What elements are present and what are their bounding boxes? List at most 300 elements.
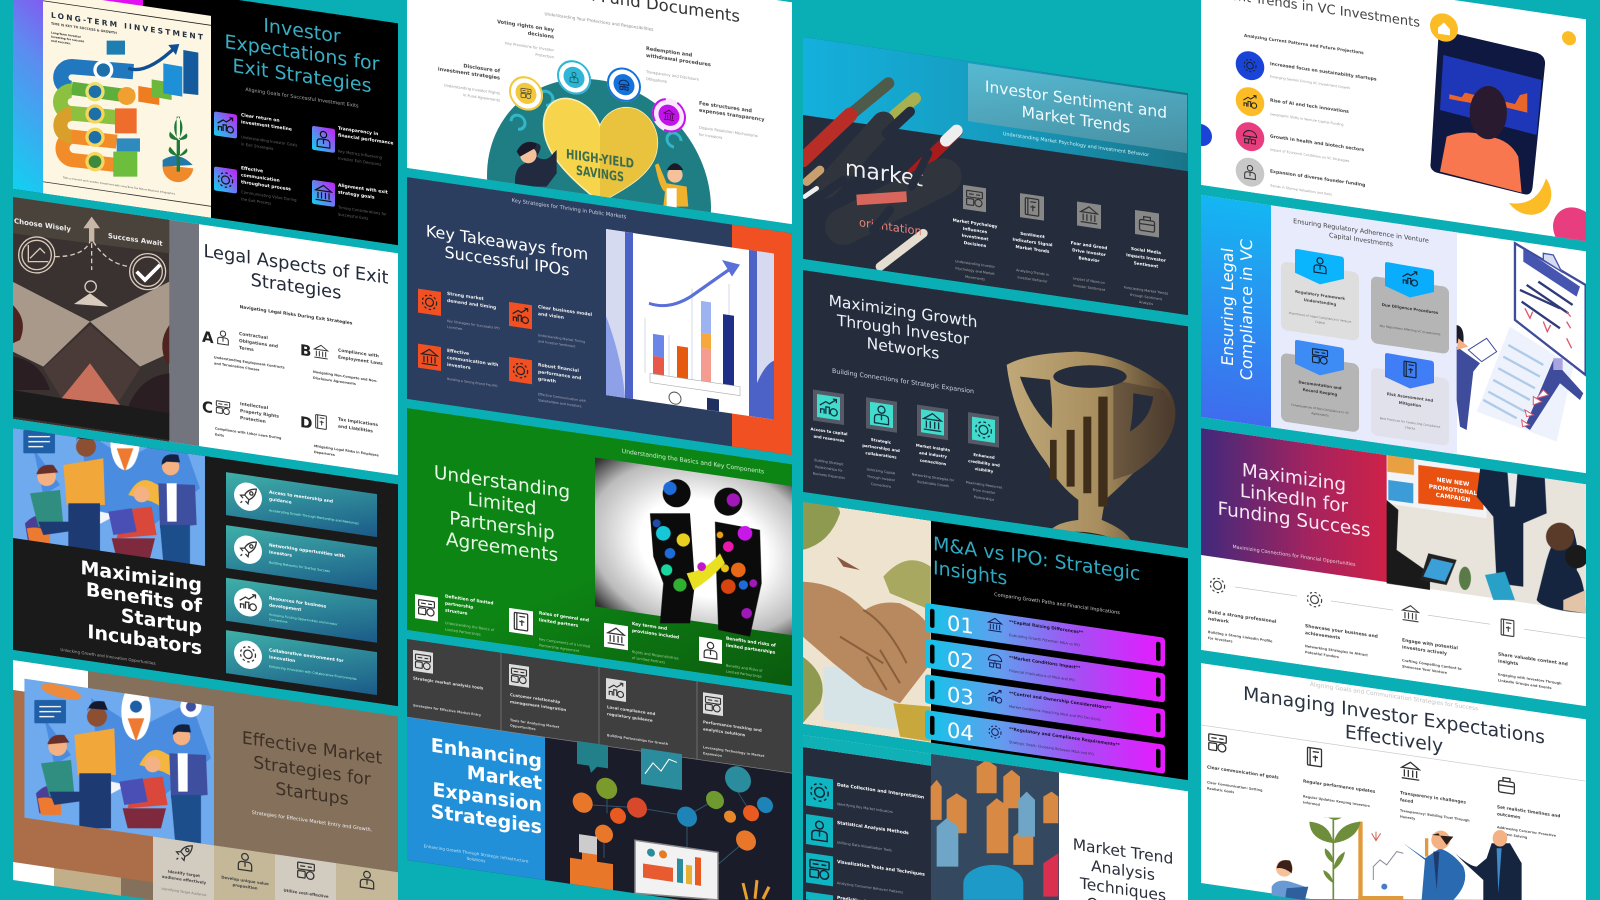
title: Maximizing Growth xyxy=(829,292,977,331)
card: networking: Building Networks for Startup Success xyxy=(269,560,330,573)
title: Strategies xyxy=(251,270,341,304)
title: Key Takeaways from xyxy=(426,221,588,264)
item B: Navigating Non-Compete and Non- xyxy=(313,370,378,383)
photo: handshake over map xyxy=(803,483,931,760)
item: social media: Forecasting Market Trends xyxy=(1124,285,1168,296)
item: sustainability xyxy=(1236,49,1377,98)
item: voting rights: Key Provisions for Investor xyxy=(505,41,554,53)
card: resources: Connections xyxy=(269,617,288,624)
item: definition xyxy=(415,589,495,639)
item: redemption xyxy=(646,46,711,83)
item: clear model xyxy=(509,300,592,351)
item: clear communication: Realistic Goals xyxy=(1207,786,1234,794)
item B: Employment Laws xyxy=(338,354,383,367)
item: sentiment indicators xyxy=(1013,192,1053,284)
card: regulatory framework: Capital xyxy=(1315,320,1325,325)
title panel xyxy=(968,63,1187,153)
photo: promotional campaign meeting: PROMOTIONAL xyxy=(1429,484,1477,497)
card: documentation: Consequences of Non-Compliance in VC xyxy=(1291,403,1349,415)
item: regular updates xyxy=(1303,747,1376,815)
item: redemption: withdrawal procedures xyxy=(646,53,711,68)
item: voting rights: decisions xyxy=(528,31,554,40)
title: Legal Aspects of Exit xyxy=(203,241,389,289)
card: risk assessment: Mitigation xyxy=(1399,400,1421,408)
title: Expansion xyxy=(432,778,542,817)
title: Agreements xyxy=(446,529,558,567)
item: data collection: Identifying Key Market Indicators xyxy=(837,802,893,814)
card: mentorship: guidance xyxy=(269,496,292,506)
item C: Intellectual xyxy=(240,401,269,411)
item: voting rights: Protection xyxy=(535,53,555,60)
card: regulatory framework xyxy=(1281,247,1359,341)
item A: A xyxy=(202,328,214,347)
item: share insights xyxy=(1498,618,1586,695)
title: M&A vs IPO: Strategic xyxy=(933,532,1140,585)
item: strong demand xyxy=(418,287,500,337)
vertical title: Compliance in VC xyxy=(1237,238,1256,382)
item: access to capital xyxy=(811,389,848,481)
item: communication: Effective xyxy=(447,348,469,357)
card: documentation: Record Keeping xyxy=(1303,387,1337,397)
item: performance tracking: Leveraging Technology in Market xyxy=(703,745,765,758)
item: transparency xyxy=(1400,761,1470,829)
item: communication: Effective xyxy=(241,165,263,175)
panel: M&A vs IPO Strategic Insights xyxy=(803,483,1188,798)
item: data collection: Data Collection and Interpretation xyxy=(837,782,924,801)
item: clear return: Clear return on xyxy=(241,112,280,124)
panel: Maximizing Benefits of Startup Incubators xyxy=(13,428,398,706)
item: partnerships: Connections xyxy=(871,482,891,489)
card: due diligence: Due Diligence Procedures xyxy=(1382,302,1439,315)
item: realistic timelines: outcomes xyxy=(1497,811,1521,821)
item: realistic timelines xyxy=(1497,777,1560,844)
title: Investor Sentiment and xyxy=(985,78,1167,122)
item: professional network: for Investors xyxy=(1208,636,1232,644)
item: partnerships: Unlocking Capital xyxy=(867,467,895,475)
illustration: high-yield savings heart: SAVINGS xyxy=(576,164,624,186)
subtitle: Aligning Goals and Communication Strategies for Success xyxy=(1310,682,1478,712)
item: share insights: Share valuable content and xyxy=(1498,651,1568,668)
photo: promotional campaign meeting xyxy=(1387,414,1588,643)
title: Understanding xyxy=(434,463,570,503)
item: market analysis tools: Strategic market analysis tools xyxy=(413,675,484,691)
item D: and Liabilities xyxy=(338,423,373,435)
item: fear and greed: Fear and Greed xyxy=(1071,240,1107,250)
item: benefits: Benefits and risks of xyxy=(726,636,776,649)
item: communication: Building a Strong Brand Pre-IPO xyxy=(447,377,498,388)
subtitle: Enhancing Growth Through Strategic Infrastructure xyxy=(424,843,529,864)
photo: crossroads: Choose Wisely xyxy=(14,216,71,234)
row 02: **Market Conditions Impact** xyxy=(1009,655,1081,671)
row 03 xyxy=(925,674,1165,738)
card: value proposition xyxy=(214,845,275,900)
card: mentorship: Accelerating Growth Through Mentorship and Resources xyxy=(269,508,359,526)
item: transparency: Transparency in challenges xyxy=(1400,790,1466,806)
item: market psychology: Psychology and Market xyxy=(955,266,995,276)
item: partnerships: Strategic xyxy=(871,437,892,445)
row 04 xyxy=(925,710,1165,774)
card: risk assessment xyxy=(1371,351,1449,446)
item: financial performance: Robust financial xyxy=(538,362,579,374)
card: maximize xyxy=(336,863,398,900)
item: transparency: financial performance xyxy=(338,132,393,147)
item: CRM integration: Tools for Analyzing Market xyxy=(510,718,560,729)
item: CRM integration: management integration xyxy=(510,699,566,712)
item: financial performance xyxy=(509,357,586,409)
photo strips: market orientation: orientation xyxy=(859,215,922,238)
item: credibility: visibility xyxy=(975,466,994,474)
item: sentiment indicators: Investor Behavior xyxy=(1018,275,1048,284)
card: documentation: Documentation and xyxy=(1298,379,1342,391)
title: Effective Market xyxy=(242,728,382,769)
panel: Investor Expectations for Exit Strategies xyxy=(13,0,398,245)
item: access to capital: and resources xyxy=(814,434,845,443)
title: Maximizing xyxy=(81,556,202,597)
item: market analysis tools: Strategies for Effective Market Entry xyxy=(413,703,482,717)
card: risk assessment: Checks xyxy=(1405,425,1416,431)
illustration: network of icons and laptop xyxy=(570,738,773,900)
item: financial performance: Effective Communication with xyxy=(538,392,586,403)
item: communication: communication xyxy=(241,172,280,184)
title: Managing Investor Expectations xyxy=(1243,683,1545,749)
item: alignment: strategy goals xyxy=(338,189,375,201)
card: value proposition: Develop unique value xyxy=(221,874,269,886)
item: diverse founders: Trends in Startup Valuations and Exits xyxy=(1269,183,1332,197)
item: diverse founders xyxy=(1236,156,1365,203)
item: disclosure: investment strategies xyxy=(438,67,500,82)
item A: and Termination Clauses xyxy=(214,361,259,372)
item: communication: communication with xyxy=(447,355,498,368)
item: transparency xyxy=(312,126,394,166)
item: market insights: Market insights xyxy=(916,443,951,453)
item A: Terms xyxy=(239,345,254,353)
item C xyxy=(202,400,282,440)
subtitle: Strategies for Effective Market Entry and Growth. xyxy=(252,810,373,833)
item: social media: Sentiment xyxy=(1134,260,1158,269)
item: showcase: Potential Funders xyxy=(1305,650,1339,659)
illustration: clipboard and reviewer xyxy=(1457,243,1586,442)
item: market psychology: Decisions xyxy=(964,240,987,248)
item: performance tracking: analytics solutions xyxy=(703,726,746,737)
item: communication xyxy=(418,344,498,388)
illustration: high-yield savings heart xyxy=(487,60,711,212)
card: resources xyxy=(226,578,377,643)
photo strips: market orientation xyxy=(803,61,957,289)
item: clear return xyxy=(214,112,298,150)
subtitle: Comparing Growth Paths and Financial Implications xyxy=(994,592,1120,616)
item: fear and greed: Impact of News on xyxy=(1073,276,1105,285)
item: access to capital: Building Strategic xyxy=(814,458,844,466)
item: professional network: Building a Strong LinkedIn Profile xyxy=(1208,630,1273,644)
item: realistic timelines: Problem Solving xyxy=(1497,831,1528,840)
item: fear and greed: Drive Investor xyxy=(1072,247,1107,257)
card: risk assessment: Risk Assessment and xyxy=(1387,391,1433,403)
item: redemption: Transparency and Disclosure xyxy=(645,70,700,82)
item: health and biotech xyxy=(1236,120,1364,168)
item: alignment: Alignment with exit xyxy=(338,182,389,196)
item: fees xyxy=(699,101,764,139)
item: key terms xyxy=(604,617,679,667)
panel: Understanding Limited Partnership Agreements xyxy=(407,408,792,686)
title: Partnership xyxy=(449,508,555,545)
decorative dot: blue xyxy=(1190,122,1212,148)
photo: crossroads xyxy=(13,197,170,442)
item: voting rights: Voting rights on key xyxy=(497,19,555,34)
card: collaboration: Enhancing Innovation with Collaborative Environments xyxy=(269,664,357,681)
item: credibility xyxy=(966,412,1002,503)
item C: Protection xyxy=(240,415,266,425)
item: local compliance: regulatory guidance xyxy=(607,711,653,723)
title: Startups xyxy=(275,779,349,810)
item: financial performance: performance and xyxy=(538,369,581,381)
item: alignment: Timing Considerations for xyxy=(337,204,387,217)
item: visualization tools: Analyzing Consumer Behavior Patterns xyxy=(837,881,903,895)
title: Market Trend xyxy=(1073,835,1173,868)
item: alignment xyxy=(312,180,388,220)
title: Enhancing xyxy=(431,734,542,773)
row 04: **Regulatory and Compliance Requirements** xyxy=(1009,726,1121,748)
item: transparency: faced xyxy=(1400,797,1413,805)
card: networking: investors xyxy=(269,549,292,559)
item: regular updates: Informed xyxy=(1303,800,1320,807)
item B: Compliance with xyxy=(338,347,379,359)
item: CRM integration: Customer relationship xyxy=(510,692,560,704)
card: networking xyxy=(226,525,377,590)
item: market insights: Sustainable Growth xyxy=(917,480,949,488)
item: clear model: and vision xyxy=(538,311,564,321)
item: sentiment indicators: Market Trends xyxy=(1016,244,1050,254)
card: identify target: Identify target xyxy=(168,869,200,878)
item: key terms: provisions included xyxy=(632,628,679,641)
panel: Investor Sentiment and Market Trends xyxy=(803,37,1188,323)
panel: Recent Trends in VC Investments xyxy=(1190,0,1597,255)
title: LinkedIn for xyxy=(1240,481,1348,518)
row 01: **Capital Raising Differences** xyxy=(1009,619,1084,636)
item: fear and greed: Behavior xyxy=(1079,255,1100,263)
panel: Effective Market Strategies for Startups xyxy=(13,643,398,900)
card: cost-effective marketing xyxy=(275,854,336,900)
item: redemption: Redemption and xyxy=(646,46,693,59)
row 01: Evaluating Growth Potential: M&A vs IPO xyxy=(1009,633,1080,647)
item: clear model: Clear business model xyxy=(538,304,592,318)
item: transparency: Transparency in xyxy=(338,125,378,137)
row 02 xyxy=(925,639,1165,703)
item: fear and greed xyxy=(1071,201,1107,292)
poster: long-term investment: Long-Term Investor xyxy=(51,31,82,39)
title: Benefits of xyxy=(86,578,203,618)
subtitle: Capital Investments xyxy=(1329,231,1394,249)
item: market psychology xyxy=(953,183,998,283)
item: regular updates: Regular performance updates xyxy=(1303,778,1376,795)
item: AI and tech xyxy=(1236,85,1349,130)
item: sustainability: Increased focus on sustainability startups xyxy=(1270,61,1377,83)
item: communication: throughout process xyxy=(241,179,291,193)
item: partnerships: partnerships and xyxy=(862,443,900,453)
poster: long-term investment: and success. xyxy=(51,39,71,45)
item B: B xyxy=(300,341,311,361)
item C: Property Rights xyxy=(240,408,279,420)
vertical title: Ensuring Legal xyxy=(1218,247,1237,367)
item B xyxy=(301,344,382,385)
item: realistic timelines: Addressing Concerns: Proactive xyxy=(1497,825,1557,838)
panel: Maximizing Growth Through Investor Networks xyxy=(803,270,1188,590)
item: definition: Definition of limited xyxy=(445,594,493,607)
subtitle: Building Connections for Strategic Expansion xyxy=(832,368,974,395)
card: resources: Accessing Funding Opportunities and Investor xyxy=(269,612,338,626)
item: sustainability: Emerging Sectors Driving VC Investment Growth xyxy=(1270,75,1350,90)
row 02: 02 xyxy=(947,646,974,675)
item: performance tracking: Expansion xyxy=(703,751,723,758)
title: Exit Strategies xyxy=(232,54,372,97)
panel: Key Takeaways from Successful IPOs xyxy=(407,177,792,455)
title: Limited xyxy=(468,489,536,520)
item: access to capital: Business Expansion xyxy=(813,471,845,480)
subtitle: Understanding Market Psychology and Investment Behavior xyxy=(1003,131,1150,159)
card: collaboration: Collaborative environment for xyxy=(269,647,344,664)
poster: long-term investment: TIME IS KEY TO SUCCESS & GROWTH xyxy=(51,22,117,35)
poster: long-term investment: Take a moment and consider Investment with Long-Term Tax Return Business Infographics xyxy=(63,175,176,196)
card: networking: Networking opportunities with xyxy=(269,542,345,559)
illustration: startup team xyxy=(13,428,206,566)
item: AI and tech: Geographic Shifts in Venture Capital Funding xyxy=(1270,112,1344,127)
item: statistical analysis xyxy=(806,814,909,859)
item: market psychology: Understanding Investor xyxy=(955,259,996,269)
item: communication: investors xyxy=(447,362,471,371)
item: definition: Limited Partnerships xyxy=(445,628,481,637)
title: Effectively xyxy=(1345,721,1443,757)
item: social media: Social Media xyxy=(1131,246,1161,255)
subtitle: Analyzing Current Patterns and Future Projections xyxy=(1244,33,1364,55)
item: fees: expenses transparency xyxy=(699,108,765,123)
title: Expectations for xyxy=(225,30,380,75)
item: disclosure: Understanding Investor Rights xyxy=(444,83,500,96)
item: social media: Analysis xyxy=(1139,300,1153,306)
row 01: 01 xyxy=(947,610,974,639)
item: clear return: Understanding Investor Goals xyxy=(241,134,297,148)
item: transparency: Key Metrics Influencing xyxy=(338,148,383,160)
card: identify target xyxy=(153,836,214,900)
item: social media: Impacts Investor xyxy=(1126,252,1167,263)
item: disclosure: Disclosure of xyxy=(463,63,501,75)
item: benefits: Benefits and Risks of xyxy=(726,664,763,673)
subtitle: Navigating Legal Risks During Exit Strategies xyxy=(240,304,353,327)
item: strong demand: Strong market xyxy=(447,291,484,302)
item: roles: Key Components of a Limited xyxy=(539,637,590,649)
item: visualization tools xyxy=(806,852,925,900)
item: roles xyxy=(509,606,590,655)
item: clear return: investment timeline xyxy=(241,119,292,133)
card: cost-effective marketing: Utilize cost-effective xyxy=(283,888,329,899)
card: mentorship xyxy=(226,472,377,537)
item: sentiment indicators: Analyzing Trends in xyxy=(1016,268,1049,277)
item: key terms: of Limited Partners xyxy=(632,656,665,665)
photo: crossroads: Success Await xyxy=(108,232,163,248)
card: identify target: audience effectively xyxy=(162,874,207,885)
title: Startup xyxy=(121,604,202,639)
row 03: **Control and Ownership Considerations** xyxy=(1009,690,1112,712)
item: engage investors: investors actively xyxy=(1402,644,1447,657)
item: benefits: Limited Partnerships xyxy=(726,670,762,679)
photo strips: market orientation: market xyxy=(845,155,923,193)
item: showcase: Networking Strategies to Attract xyxy=(1305,644,1368,657)
item: diverse founders: Expansion of diverse founder funding xyxy=(1270,169,1365,188)
item: partnerships: collaborations xyxy=(865,450,897,460)
chart: rising bars xyxy=(606,229,774,420)
title: Through Investor xyxy=(836,311,970,349)
item: market insights: Networking Strategies for xyxy=(912,472,955,483)
item: showcase: Showcase your business and xyxy=(1305,623,1378,640)
item: alignment: Successful Exits xyxy=(338,211,368,221)
item: professional network xyxy=(1208,577,1297,653)
item: credibility: Maximizing Resources xyxy=(966,480,1002,490)
illustration: handshake silhouettes with gears xyxy=(595,455,792,657)
item: clear communication: Clear Communication: Setting xyxy=(1207,780,1263,793)
item D xyxy=(301,414,379,456)
item: partnerships: Through Investor xyxy=(866,474,896,483)
item D: Mitigating Legal Risks in Employee xyxy=(314,444,380,458)
item: strong demand: Key Strategies for Successful IPO xyxy=(447,319,500,331)
item: engage investors: Crafting Compelling Content to xyxy=(1402,658,1462,671)
subtitle: Ensuring Regulatory Adherence in Venture xyxy=(1293,217,1429,245)
item A: Understanding Employment Contracts xyxy=(214,355,285,370)
illustration: trophy with rising chart xyxy=(1007,352,1175,564)
item: local compliance: Local compliance and xyxy=(607,704,656,716)
item B: Disclosure Agreements xyxy=(313,376,356,386)
item: market insights: connections xyxy=(920,458,947,466)
item: definition: Understanding the Basics of xyxy=(445,621,495,632)
item: fear and greed: Investor Sentiment xyxy=(1073,283,1106,292)
panel: Legal Aspects of Exit Strategies xyxy=(13,197,398,476)
title: Strategies for xyxy=(253,753,372,790)
item: voting rights xyxy=(497,19,555,60)
row 01 xyxy=(925,603,1165,667)
illustration: high-yield savings heart: HIIGH-YIELD xyxy=(566,147,634,172)
item: key terms: Rights and Responsibilities xyxy=(632,650,679,661)
item: redemption: Obligations xyxy=(646,77,667,84)
item: financial performance: growth xyxy=(538,376,556,385)
subtitle: Key Strategies for Thriving in Public Markets xyxy=(512,198,627,221)
subtitle: Unlocking Growth and Innovation Opportunities xyxy=(60,647,156,666)
card: regulatory framework: Understanding xyxy=(1304,297,1336,307)
item: definition: structure xyxy=(445,608,468,617)
panel: Enhancing Market Expansion Strategies xyxy=(407,639,792,900)
item: definition: partnership xyxy=(445,601,473,611)
picture: 3D bars and pie xyxy=(931,741,1059,900)
item: CRM integration: Opportunities xyxy=(510,724,536,731)
item: sentiment indicators: Sentiment xyxy=(1020,231,1045,239)
item: share insights: insights xyxy=(1498,658,1518,667)
item: engage investors: Engage with potential xyxy=(1402,637,1458,652)
title: Market Trends xyxy=(1022,103,1130,137)
card: documentation: Agreements xyxy=(1311,411,1329,418)
card: value proposition: proposition xyxy=(232,882,258,891)
title: Strategies xyxy=(431,800,542,839)
item: roles: limited partners xyxy=(539,617,579,629)
item: performance tracking: Performance tracking and xyxy=(703,719,762,733)
item: access to capital: Relationships for xyxy=(815,465,843,473)
card: resources: development xyxy=(269,602,301,613)
illustration: growth plant and advisers xyxy=(1272,817,1522,900)
item: transparency: Transparency: Building Trust Through xyxy=(1400,809,1470,823)
item: roles: Roles of general and xyxy=(539,610,589,624)
item: credibility: Partnerships xyxy=(974,495,994,502)
item: market psychology: Movements xyxy=(965,275,985,282)
item: market analysis tools xyxy=(413,650,484,718)
item: strong demand: demand and timing xyxy=(447,298,496,311)
item: regular updates: Regular Updates: Keeping Investors xyxy=(1303,794,1370,808)
item: share insights: Engaging with Investors Through xyxy=(1498,672,1562,686)
item: fees: Fee structures and xyxy=(699,101,752,114)
